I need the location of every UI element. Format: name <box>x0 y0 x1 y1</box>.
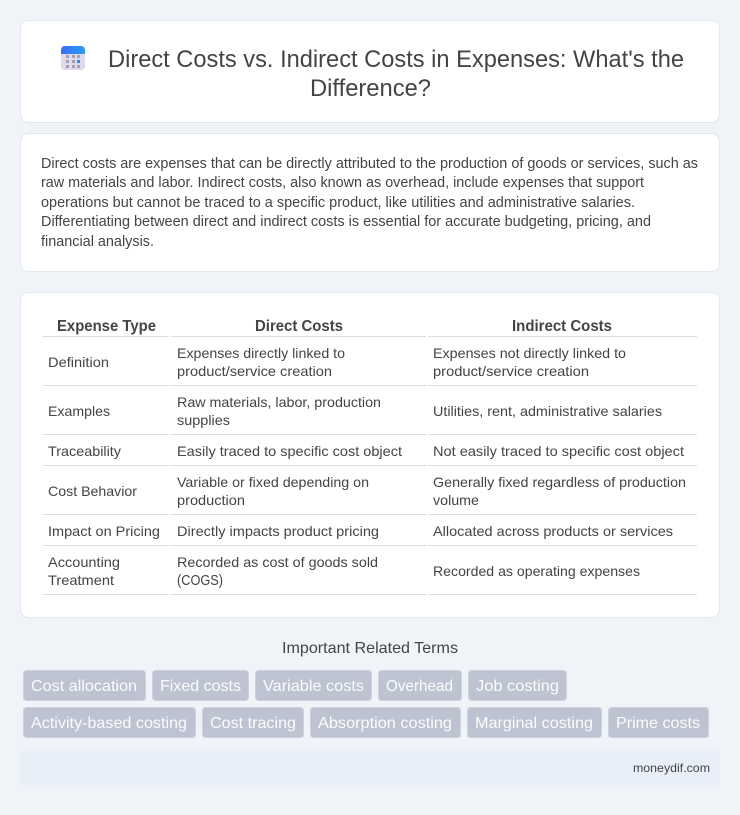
intro paragraph: financial analysis. <box>41 234 154 250</box>
table header: Expense Type <box>57 318 156 335</box>
tags: related terms: Cost allocation <box>31 678 137 695</box>
row: accounting treatment: Recorded as operating expenses <box>433 563 640 579</box>
table header <box>57 318 612 335</box>
intro paragraph: operations but cannot be traced to a specific product, like utilities and administrative salaries. <box>41 195 635 211</box>
row: definition: product/service creation <box>433 363 589 379</box>
row: definition: Expenses not directly linked to <box>433 345 626 361</box>
panel: intro text card <box>20 134 720 272</box>
row: examples: Utilities, rent, administrative salaries <box>433 403 662 419</box>
row: impact on pricing: Impact on Pricing <box>48 523 160 539</box>
tags: related terms: Prime costs <box>616 715 700 732</box>
title: Difference? <box>310 75 431 102</box>
table header: Indirect Costs <box>512 318 612 335</box>
row: accounting treatment: Recorded as cost of goods sold <box>177 554 378 570</box>
intro paragraph: Direct costs are expenses that can be directly attributed to the production of goods or services, such as <box>41 156 698 172</box>
panel: comparison table card <box>20 292 720 618</box>
icon: calendar <box>61 46 85 70</box>
row: definition: Definition <box>48 354 109 370</box>
row: traceability: Traceability <box>48 443 121 459</box>
footer <box>20 751 720 785</box>
row: traceability <box>48 443 684 459</box>
row: cost behavior: Variable or fixed depending on <box>177 474 369 490</box>
tags: related terms <box>24 670 708 738</box>
panel: title card <box>20 20 720 122</box>
row: definition: product/service creation <box>177 363 332 379</box>
row: definition: Expenses directly linked to <box>177 345 345 361</box>
row: definition <box>48 345 626 379</box>
row: traceability: Easily traced to specific cost object <box>177 443 402 459</box>
row: cost behavior: Cost Behavior <box>48 483 137 499</box>
row: traceability: Not easily traced to specific cost object <box>433 443 684 459</box>
row: examples: Examples <box>48 403 110 419</box>
row: accounting treatment <box>48 554 640 589</box>
title <box>108 46 684 102</box>
row: examples <box>48 394 662 428</box>
row: accounting treatment: Accounting <box>48 554 120 570</box>
row: cost behavior: production <box>177 492 245 508</box>
tags: related terms: Fixed costs <box>160 678 241 695</box>
tags: related terms: Cost tracing <box>210 715 296 732</box>
row: examples: Raw materials, labor, production <box>177 394 381 410</box>
tags: related terms: Activity-based costing <box>31 715 187 732</box>
tags: related terms: Variable costs <box>263 678 364 695</box>
intro paragraph: raw materials and labor. Indirect costs, also known as overhead, include expenses that support <box>41 175 644 191</box>
tags: related terms: Absorption costing <box>318 715 452 732</box>
row: cost behavior: Generally fixed regardless of production <box>433 474 686 490</box>
tags: related terms: Job costing <box>476 678 559 695</box>
row: cost behavior <box>48 474 686 508</box>
row: cost behavior: volume <box>433 492 479 508</box>
intro paragraph <box>41 156 698 250</box>
footer: moneydif.com <box>633 761 710 775</box>
intro paragraph: Differentiating between direct and indirect costs is essential for accurate budgeting, pricing, and <box>41 214 651 230</box>
tags: related terms: Overhead <box>386 678 453 695</box>
table header: Direct Costs <box>255 318 343 335</box>
title: Direct Costs vs. Indirect Costs in Expenses: What's the <box>108 46 684 73</box>
row: impact on pricing <box>48 523 673 539</box>
row: accounting treatment: Treatment <box>48 572 114 588</box>
row: impact on pricing: Directly impacts product pricing <box>177 523 379 539</box>
row: impact on pricing: Allocated across products or services <box>433 523 673 539</box>
row: examples: supplies <box>177 412 230 428</box>
heading: related terms: Important Related Terms <box>282 640 458 657</box>
tags: related terms: Marginal costing <box>475 715 593 732</box>
row: accounting treatment: (COGS) <box>177 572 223 589</box>
